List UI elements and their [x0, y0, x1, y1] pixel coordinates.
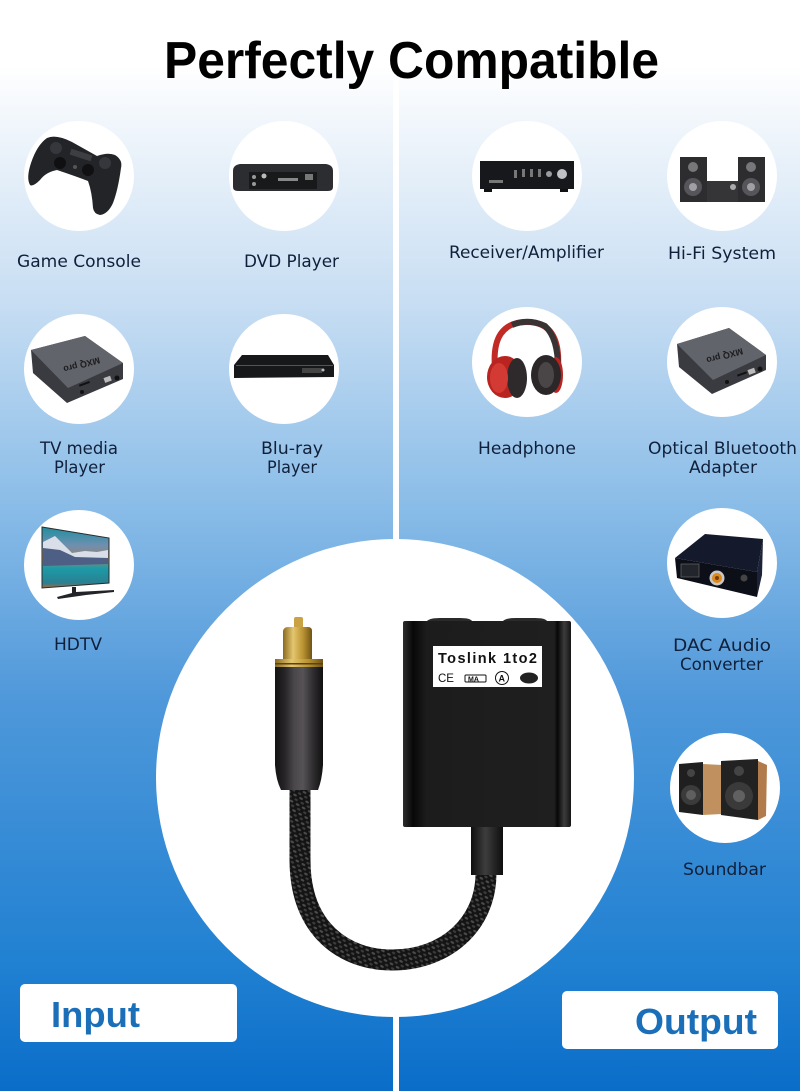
device: game console	[24, 121, 134, 231]
label: optical Bluetooth adapter: Optical Bluetooth	[648, 439, 797, 459]
input badge: Input	[51, 994, 140, 1035]
brand mark: MXQ pro: MXQ pro	[705, 346, 744, 366]
label: game console: Game Console	[17, 252, 141, 272]
optical connector	[275, 617, 323, 790]
label: Blu-ray player: Player	[267, 458, 317, 478]
product label: MA	[468, 676, 479, 684]
label: optical Bluetooth adapter: Adapter	[689, 458, 757, 478]
label: optical Bluetooth adapter	[648, 439, 797, 478]
label: DAC audio converter: Converter	[680, 655, 763, 675]
product label: Toslink 1to2	[438, 651, 537, 667]
label: headphone: Headphone	[478, 439, 576, 459]
label: Blu-ray player: Blu-ray	[261, 439, 323, 459]
label: Blu-ray player	[261, 439, 323, 478]
panel: input devices	[17, 121, 339, 655]
brand mark: MXQ pro: MXQ pro	[62, 355, 101, 375]
device: Blu-ray player	[229, 314, 339, 424]
label: DVD player: DVD Player	[244, 252, 339, 272]
device: headphone	[472, 307, 582, 417]
product circle: Toslink splitter	[156, 539, 634, 1017]
output badge: Output	[635, 1001, 757, 1042]
input badge	[20, 984, 237, 1042]
label: TV media player: TV media	[39, 439, 118, 459]
label: HDTV: HDTV	[54, 635, 102, 655]
device: HDTV	[24, 510, 134, 620]
product label: A	[498, 674, 506, 684]
label: Hi-Fi system: Hi-Fi System	[668, 244, 776, 264]
label: DAC audio converter	[673, 636, 771, 675]
device: soundbar	[670, 733, 780, 843]
device: DAC audio converter	[667, 508, 777, 618]
center divider line	[393, 80, 399, 1091]
panel: output devices	[449, 121, 797, 880]
braided cable	[300, 788, 486, 960]
device: Hi-Fi system	[667, 121, 777, 231]
output badge	[562, 991, 778, 1049]
device: receiver/amplifier	[472, 121, 582, 231]
label: soundbar: Soundbar	[683, 860, 766, 880]
device: TV media player	[24, 314, 134, 424]
label: DAC audio converter: DAC Audio	[673, 636, 771, 656]
device: optical Bluetooth adapter	[667, 307, 777, 417]
product label	[433, 646, 542, 687]
label: TV media player: Player	[54, 458, 105, 478]
title: Perfectly Compatible	[164, 32, 659, 90]
product label: CE	[438, 673, 454, 685]
label: receiver/amplifier: Receiver/Amplifier	[449, 243, 604, 263]
splitter box	[403, 618, 571, 875]
device: DVD player	[229, 121, 339, 231]
label: TV media player	[39, 439, 118, 478]
